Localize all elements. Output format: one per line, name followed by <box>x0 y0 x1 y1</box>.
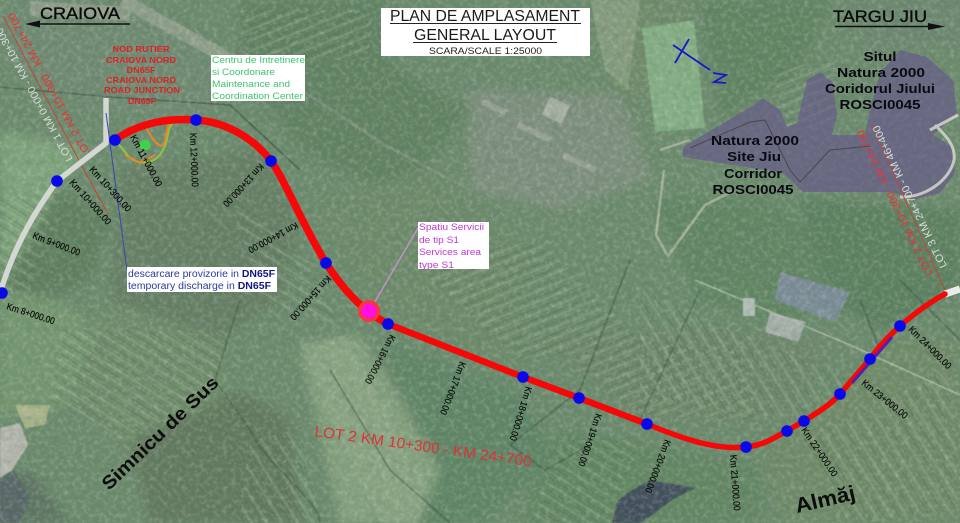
kilometre labels: Km 21+000.00 <box>727 454 742 511</box>
kilometre labels: Km 22+000.00 <box>799 426 840 479</box>
kilometre markers <box>0 114 906 453</box>
kilometre labels: Km 9+000.00 <box>31 231 82 259</box>
kilometre labels: Km 10+000.00 <box>67 178 113 227</box>
title box <box>381 8 590 57</box>
kilometre labels: Km 24+000.00 <box>906 324 953 372</box>
lot 1 / lot 2 boundary: LOT 2 KM 10+300 - KM 24+700 <box>6 10 95 160</box>
maintenance centre label: Maintenance and <box>212 79 290 90</box>
maintenance centre label: Centru de Intretinere <box>212 55 305 66</box>
railway <box>695 280 960 395</box>
kilometre labels: Km 18+000.00 <box>507 385 534 442</box>
temporary discharge line <box>106 113 127 270</box>
lot 2 / lot 3 boundary: LOT 3 KM 24+700 - KM 46+400 <box>870 123 950 270</box>
maintenance centre label: si Coordonare <box>212 67 275 78</box>
lot 1 / lot 2 boundary <box>0 10 108 214</box>
pale meadow <box>300 335 425 523</box>
temporary discharge label: temporary discharge in DN65F <box>128 281 271 292</box>
temporary discharge label <box>127 267 277 292</box>
natura 2000 site label romanian: Natura 2000 <box>837 65 925 80</box>
title box: SCARA/SCALE 1:25000 <box>429 46 542 57</box>
north arrow <box>673 39 726 83</box>
kilometre labels: Km 13+000.00 <box>220 161 266 209</box>
kilometre labels: Km 23+000.00 <box>859 378 910 422</box>
road east end <box>945 289 960 294</box>
services area label <box>418 222 489 271</box>
locality almaj: Almăj <box>793 482 858 518</box>
road junction label: CRAIOVA NORD <box>106 55 176 65</box>
natura 2000 site label romanian: Coridorul Jiului <box>825 81 935 96</box>
kilometre labels: Km 15+000.00 <box>287 273 333 322</box>
kilometre labels: Km 8+000.00 <box>5 301 56 327</box>
kilometre labels: Km 16+000.00 <box>362 333 397 385</box>
road junction label: ROAD JUNCTION <box>104 85 180 95</box>
lot 2 map label: LOT 2 KM 10+300 - KM 24+700 <box>313 423 533 470</box>
kilometre labels: Km 19+000.00 <box>575 412 604 468</box>
services area label: type S1 <box>419 260 454 271</box>
road junction label: CRAIOVA NORD <box>106 75 176 85</box>
title box: GENERAL LAYOUT <box>414 27 557 44</box>
temporary discharge label: descarcare provizorie in DN65F <box>128 269 275 280</box>
natura 2000 site label english: ROSCI0045 <box>712 182 794 197</box>
road junction label: DN65F <box>126 65 156 75</box>
craiova direction label and arrow: CRAIOVA <box>40 4 121 23</box>
natura 2000 site label english <box>711 133 799 197</box>
natura 2000 protected area <box>683 50 957 200</box>
services area label: Services area <box>419 247 482 258</box>
kilometre labels <box>5 133 953 511</box>
road junction label: DN65F <box>128 96 156 106</box>
greenhouses <box>775 272 850 322</box>
kilometre labels: Km 10+300.00 <box>87 165 133 214</box>
lot 2 / lot 3 boundary: LOT 2 KM 10+300 - KM 24+700 <box>855 128 936 278</box>
kilometre labels: Km 12+000.00 <box>187 133 200 187</box>
junction green marker <box>140 140 150 150</box>
river bed <box>656 140 735 256</box>
road junction label: NOD RUTIER <box>112 44 170 54</box>
natura 2000 site label romanian <box>825 49 935 112</box>
craiova direction label and arrow <box>25 4 130 28</box>
existing road DN65F <box>0 98 106 293</box>
industrial blocks <box>481 96 597 173</box>
urban strip <box>122 0 245 68</box>
lot 2 / lot 3 boundary <box>855 123 950 290</box>
light khaki parcel <box>590 0 640 90</box>
services area marker <box>358 300 380 322</box>
natura 2000 site label english: Natura 2000 <box>711 133 799 148</box>
services area label: Spatiu Servicii <box>419 222 484 233</box>
title box: PLAN DE AMPLASAMENT <box>390 8 581 25</box>
targu jiu direction label and arrow <box>833 7 945 30</box>
targu jiu direction label and arrow: TARGU JIU <box>833 7 927 26</box>
kilometre labels: Km 17+000.00 <box>437 360 467 416</box>
kilometre labels: Km 20+000.00 <box>642 438 672 494</box>
natura 2000 site label english: Site Jiu <box>727 149 781 164</box>
dark lake <box>612 480 695 523</box>
natura 2000 site label romanian: Situl <box>864 49 896 64</box>
services area label: de tip S1 <box>419 235 459 246</box>
junction loops <box>115 124 173 163</box>
light pasture <box>642 20 705 132</box>
maintenance centre label <box>211 55 305 102</box>
natura 2000 site label english: Corridor <box>724 166 782 181</box>
road junction label <box>104 44 180 106</box>
maintenance centre label: Coordination Center <box>212 91 303 102</box>
services area leader <box>373 228 418 305</box>
white river loop <box>900 115 958 197</box>
river in natura site <box>690 120 870 182</box>
motorway lot 2 <box>115 120 945 448</box>
purple section of road <box>852 337 892 383</box>
natura 2000 site label romanian: ROSCI0045 <box>840 97 920 112</box>
kilometre labels: Km 14+000.00 <box>246 219 300 255</box>
locality simnicu de sus: Simnicu de Sus <box>97 372 223 494</box>
kilometre labels: Km 11+000.00 <box>127 133 164 189</box>
white quarry <box>0 423 28 478</box>
thin dark boundaries <box>0 87 300 170</box>
